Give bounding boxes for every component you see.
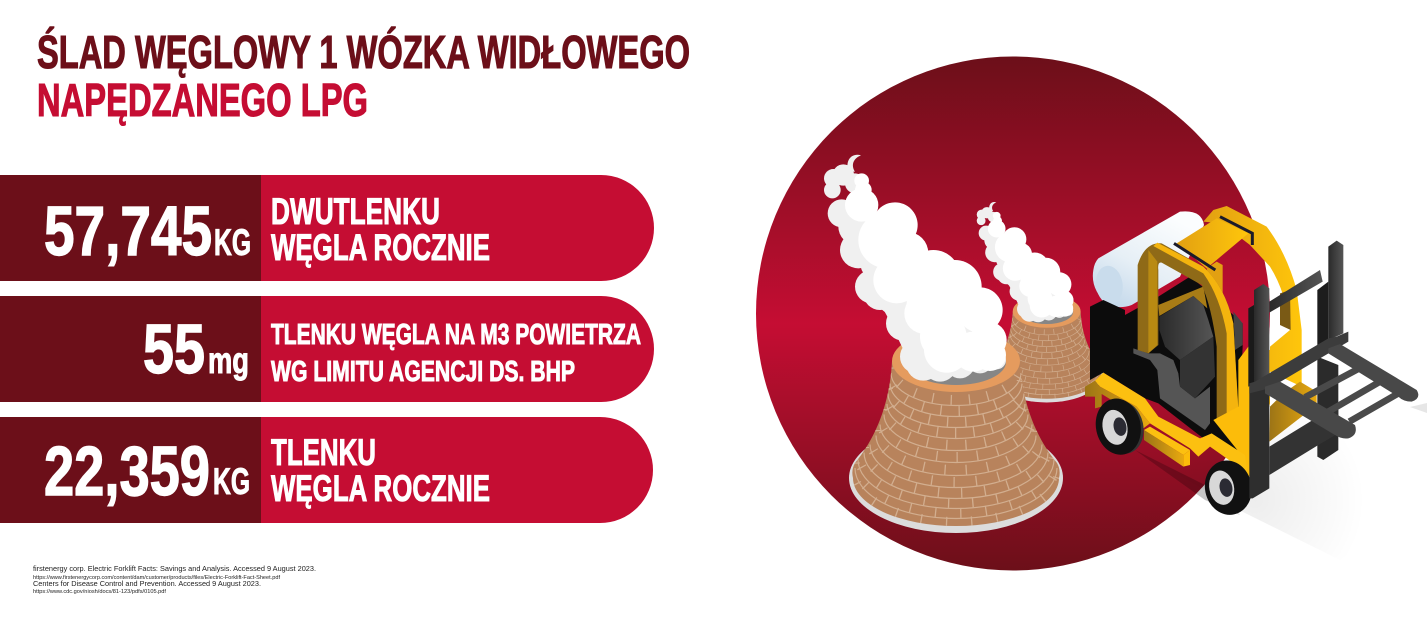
far roll cage arch <box>1203 206 1302 387</box>
mast <box>1248 241 1348 498</box>
near roll cage arch <box>1138 243 1238 420</box>
seat <box>1133 287 1243 430</box>
title: ŚLAD WĘGLOWY 1 WÓZKA WIDŁOWEGO <box>37 26 690 78</box>
footnotes: https://www.cdc.gov/niosh/docs/81-123/pdfs/0105.pdf <box>33 589 167 595</box>
value: 22,359 kg: KG <box>213 461 250 502</box>
footnotes: https://www.firstenergycorp.com/content/dam/customer/products/files/Electric-Forklift-Fact-Sheet.pdf <box>33 575 281 581</box>
value: 55 mg: mg <box>208 340 249 381</box>
title <box>37 26 690 126</box>
roof <box>1174 217 1252 300</box>
footnotes: Centers for Disease Control and Prevention. Accessed 9 August 2023. <box>33 579 261 588</box>
label: carbon monoxide: TLENKU <box>271 432 376 473</box>
label: carbon dioxide: WĘGLA ROCZNIE <box>271 227 490 268</box>
illustration: red circle background <box>756 56 1270 570</box>
label: carbon monoxide limit: TLENKU WĘGLA NA M3 POWIETRZA <box>271 319 641 351</box>
rear wheel <box>1091 394 1148 459</box>
label: carbon monoxide <box>271 432 490 509</box>
forks <box>1265 344 1418 439</box>
label: carbon dioxide <box>271 191 490 268</box>
value: 57,745 kg: KG <box>214 222 251 263</box>
front wheel <box>1200 456 1257 519</box>
forklift shadow <box>1135 400 1427 560</box>
label: carbon monoxide limit <box>271 319 641 388</box>
value: 57,745 kg: 57,745 <box>44 192 212 270</box>
panel: carbon monoxide per year <box>0 417 653 523</box>
value: 22,359 kg: 22,359 <box>44 432 210 510</box>
label: carbon dioxide: DWUTLENKU <box>271 191 440 232</box>
label: carbon monoxide limit: WG LIMITU AGENCJI DS. BHP <box>271 356 575 388</box>
icon: small cooling tower with smoke <box>977 202 1103 402</box>
forklift body <box>1090 277 1247 453</box>
LPG tank <box>1093 211 1204 307</box>
value: 55 mg: 55 <box>143 310 205 388</box>
chassis <box>1085 347 1317 480</box>
icon: LPG forklift <box>1085 206 1418 519</box>
panel: carbon dioxide per year <box>0 175 654 281</box>
label: carbon monoxide: WĘGLA ROCZNIE <box>271 468 490 509</box>
title: NAPĘDZANEGO LPG <box>37 74 368 126</box>
panel: carbon monoxide limit <box>0 296 654 402</box>
footnotes: firstenergy corp. Electric Forklift Facts: Savings and Analysis. Accessed 9 August 2023. <box>33 564 316 573</box>
footnotes <box>33 564 316 595</box>
icon: large cooling tower with smoke <box>824 155 1063 533</box>
